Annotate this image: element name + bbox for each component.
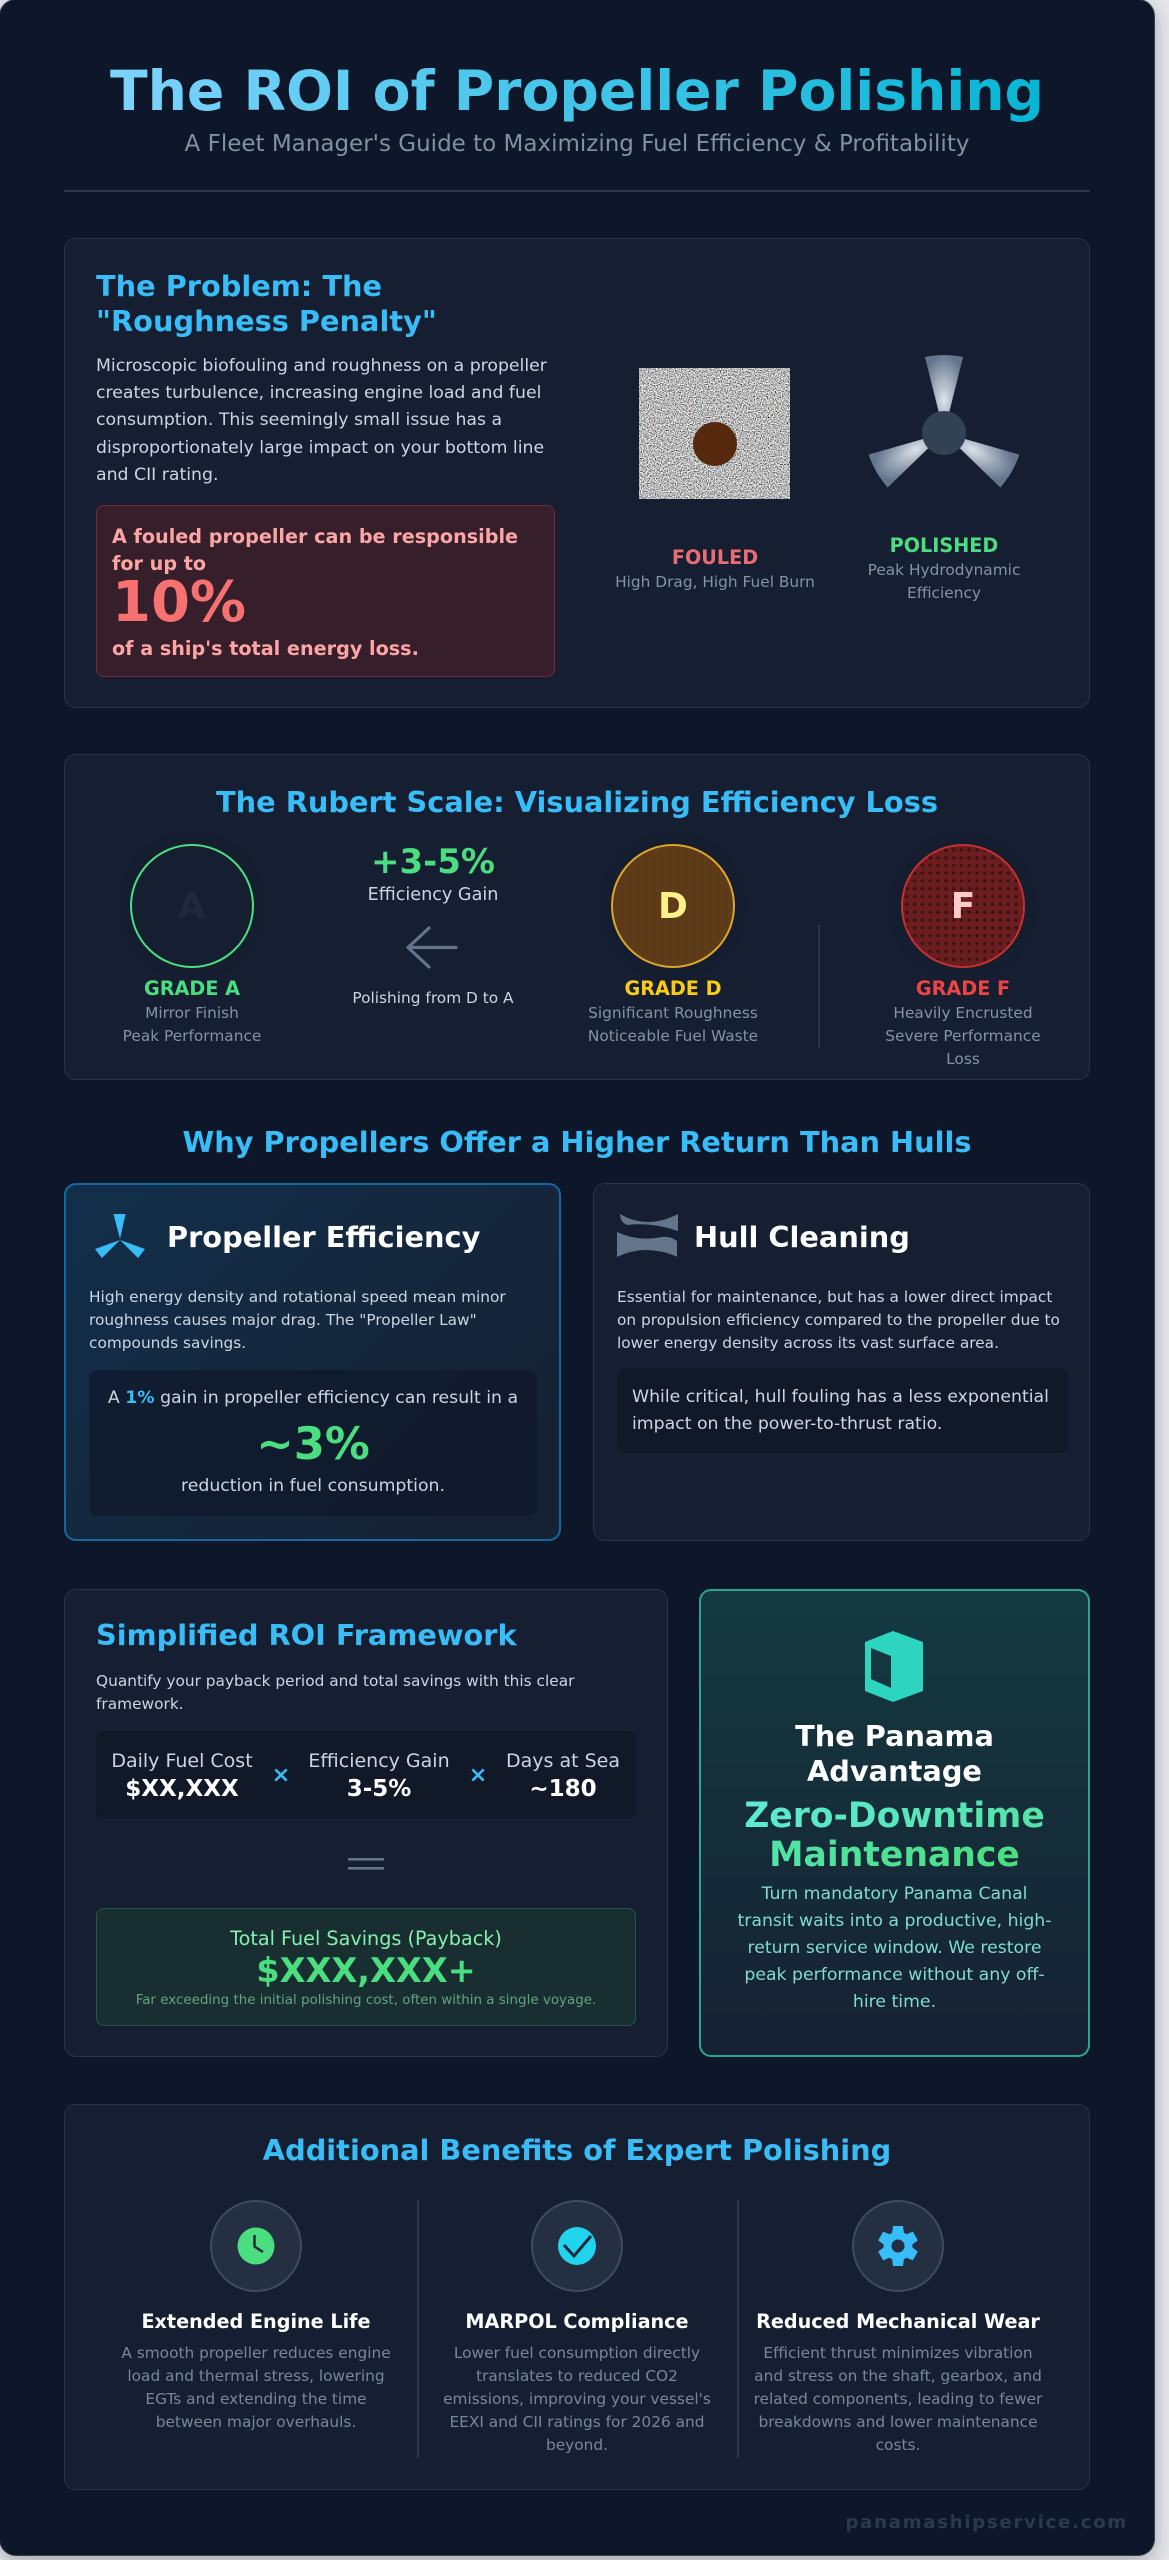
efficiency gain: 3-5%: [347, 1776, 411, 1802]
benefit description: [121, 2344, 391, 2430]
formula row: [96, 1731, 636, 1819]
panel: ROI framework: [64, 1589, 668, 2057]
grade A label: GRADE A: [144, 977, 240, 1000]
panama description: peak performance without any off-: [744, 1964, 1045, 1984]
benefit title: MARPOL Compliance: [465, 2310, 689, 2333]
savings note: Far exceeding the initial polishing cost, often within a single voyage.: [136, 1993, 596, 2008]
grade D circle: [611, 844, 735, 968]
total savings box: [96, 1908, 636, 2026]
icon: fouled propeller: [639, 368, 790, 499]
note box: [617, 1368, 1068, 1453]
equals sign: [348, 1858, 384, 1870]
card description: High energy density and rotational speed mean minor: [89, 1288, 506, 1306]
grade F description: Heavily Encrusted: [893, 1004, 1033, 1022]
benefit description: Efficient thrust minimizes vibration: [763, 2344, 1033, 2362]
stat intro: A 1% gain in propeller efficiency can result in a: [108, 1388, 518, 1408]
card description: on propulsion efficiency compared to the propeller due to: [617, 1311, 1060, 1329]
benefit description: translates to reduced CO2: [476, 2366, 678, 2384]
grade A description: Mirror Finish: [145, 1004, 239, 1022]
days at sea: [506, 1750, 620, 1802]
stat outro: reduction in fuel consumption.: [181, 1476, 445, 1496]
icon: clock: [210, 2200, 302, 2292]
polished description: Efficiency: [907, 584, 981, 602]
icon: hull: [617, 1214, 678, 1257]
grade A circle: [130, 844, 254, 968]
grade A description: Peak Performance: [123, 1026, 261, 1044]
callout outro: of a ship's total energy loss.: [112, 636, 419, 660]
benefit: engine life: [121, 2200, 391, 2430]
problem description: creates turbulence, increasing engine load and fuel: [96, 383, 541, 403]
days at sea: Days at Sea: [506, 1750, 620, 1772]
savings value: $XXX,XXX+: [256, 1950, 476, 1990]
fouled description: High Drag, High Fuel Burn: [615, 572, 815, 590]
efficiency gain: [308, 1750, 450, 1802]
icon: propeller: [95, 1214, 145, 1258]
benefit description: EEXI and CII ratings for 2026 and: [449, 2412, 705, 2430]
card description: [89, 1288, 506, 1352]
panama description: hire time.: [853, 1992, 936, 2012]
benefit description: beyond.: [546, 2436, 608, 2454]
panama description: Turn mandatory Panama Canal: [762, 1884, 1027, 1904]
icon: gear: [852, 2200, 944, 2292]
heading: rubert scale: The Rubert Scale: Visualizing Efficiency Loss: [216, 785, 938, 819]
panel: propeller efficiency: [64, 1183, 561, 1541]
panama title: [795, 1719, 994, 1788]
panama highlight: [744, 1796, 1045, 1875]
panel: the problem: [64, 238, 1090, 708]
benefit title: Extended Engine Life: [141, 2310, 371, 2333]
card description: [617, 1288, 1060, 1352]
grade F circle: F: [951, 886, 975, 926]
grade D description: Noticeable Fuel Waste: [588, 1026, 758, 1044]
card description: lower energy density across its vast surface area.: [617, 1334, 999, 1352]
benefit description: related components, leading to fewer: [754, 2390, 1042, 2408]
grade F description: [885, 1004, 1041, 1068]
icon: canal lock: [865, 1631, 923, 1702]
icon: check: [531, 2200, 623, 2292]
problem description: Microscopic biofouling and roughness on a propeller: [96, 356, 547, 376]
polished description: [868, 560, 1020, 602]
multiply sign: ×: [469, 1762, 487, 1788]
callout: 10 percent energy loss: [96, 505, 555, 677]
benefit description: breakdowns and lower maintenance: [758, 2412, 1038, 2430]
callout stat: 10%: [112, 570, 246, 635]
heading: ROI framework: Simplified ROI Framework: [96, 1618, 517, 1652]
heading: roughness penalty: [96, 269, 437, 338]
grade D description: Significant Roughness: [588, 1004, 758, 1022]
panel: hull cleaning: [593, 1183, 1090, 1541]
framework description: framework.: [96, 1695, 184, 1713]
subtitle: A Fleet Manager's Guide to Maximizing Fuel Efficiency & Profitability: [185, 131, 969, 157]
callout intro: for up to: [112, 552, 206, 574]
heading: roughness penalty: The Problem: The: [96, 269, 382, 303]
savings label: Total Fuel Savings (Payback): [230, 1926, 502, 1950]
problem description: disproportionately large impact on your bottom line: [96, 438, 544, 458]
benefit description: EGTs and extending the time: [145, 2390, 367, 2408]
panama highlight: Maintenance: [769, 1835, 1020, 1875]
note text: [632, 1386, 1049, 1434]
benefit description: A smooth propeller reduces engine: [121, 2344, 391, 2362]
footer website: panamashipservice.com: [846, 2512, 1128, 2533]
grade D description: [588, 1004, 758, 1044]
note text: impact on the power-to-thrust ratio.: [632, 1414, 942, 1434]
benefit description: and stress on the shaft, gearbox, and: [754, 2366, 1042, 2384]
grade D circle: D: [658, 886, 688, 926]
grade D label: GRADE D: [624, 977, 722, 1000]
card description: compounds savings.: [89, 1334, 246, 1352]
polished description: Peak Hydrodynamic: [868, 560, 1020, 578]
problem description: [96, 356, 547, 485]
daily fuel cost: [111, 1750, 253, 1802]
heading: propellers versus hulls: Why Propellers Offer a Higher Return Than Hulls: [182, 1124, 972, 1158]
panama description: return service window. We restore: [748, 1938, 1041, 1958]
panel: additional benefits: [64, 2104, 1090, 2490]
panama description: [738, 1884, 1052, 2012]
daily fuel cost: $XX,XXX: [125, 1776, 239, 1802]
panel: panama advantage: [699, 1589, 1090, 2057]
problem description: consumption. This seemingly small issue has a: [96, 410, 502, 430]
panama title: Advantage: [807, 1754, 982, 1788]
multiply sign: ×: [272, 1762, 290, 1788]
benefit description: Lower fuel consumption directly: [454, 2344, 700, 2362]
problem description: and CII rating.: [96, 465, 218, 485]
card description: Essential for maintenance, but has a lower direct impact: [617, 1288, 1052, 1306]
benefit description: [754, 2344, 1042, 2454]
callout intro: [112, 524, 518, 574]
framework description: [96, 1672, 574, 1713]
efficiency gain label: Efficiency Gain: [368, 885, 498, 905]
fouled label: FOULED: [672, 546, 758, 569]
card title: Hull Cleaning: [694, 1220, 910, 1254]
grade A circle: A: [178, 886, 205, 926]
daily fuel cost: Daily Fuel Cost: [111, 1750, 253, 1772]
panel: rubert scale: [64, 754, 1090, 1080]
benefit description: [443, 2344, 711, 2454]
benefit: MARPOL compliance: [443, 2200, 711, 2454]
grade F label: GRADE F: [916, 977, 1010, 1000]
callout intro: A fouled propeller can be responsible: [112, 524, 518, 548]
grade F circle: [901, 844, 1025, 968]
stat box: 3 percent fuel reduction: [89, 1370, 537, 1516]
efficiency gain stat: +3-5%: [371, 842, 495, 882]
benefit description: emissions, improving your vessel's: [443, 2390, 711, 2408]
title: The ROI of Propeller Polishing: [110, 60, 1044, 124]
polished label: POLISHED: [890, 534, 998, 557]
grade A description: [123, 1004, 261, 1044]
arrow caption: Polishing from D to A: [352, 989, 514, 1007]
efficiency gain: Efficiency Gain: [308, 1750, 450, 1772]
icon: polished propeller: [868, 355, 1020, 488]
heading: additional benefits: Additional Benefits of Expert Polishing: [263, 2133, 891, 2167]
grade F description: Loss: [946, 1050, 980, 1068]
card title: Propeller Efficiency: [167, 1220, 480, 1254]
days at sea: ~180: [529, 1776, 597, 1802]
heading: roughness penalty: "Roughness Penalty": [96, 304, 437, 338]
card description: roughness causes major drag. The "Propeller Law": [89, 1310, 477, 1328]
benefit description: costs.: [876, 2436, 920, 2454]
panama highlight: Zero-Downtime: [744, 1796, 1045, 1836]
panama title: The Panama: [795, 1719, 994, 1753]
benefit title: Reduced Mechanical Wear: [756, 2310, 1040, 2333]
panama description: transit waits into a productive, high-: [738, 1910, 1052, 1930]
stat value: ~3%: [256, 1417, 370, 1470]
benefit: mechanical wear: [754, 2200, 1042, 2454]
benefit description: between major overhauls.: [156, 2412, 356, 2430]
framework description: Quantify your payback period and total savings with this clear: [96, 1672, 574, 1690]
benefit description: load and thermal stress, lowering: [127, 2366, 385, 2384]
note text: While critical, hull fouling has a less exponential: [632, 1386, 1049, 1406]
arrow: D to A: [406, 926, 458, 969]
grade F description: Severe Performance: [885, 1026, 1041, 1044]
